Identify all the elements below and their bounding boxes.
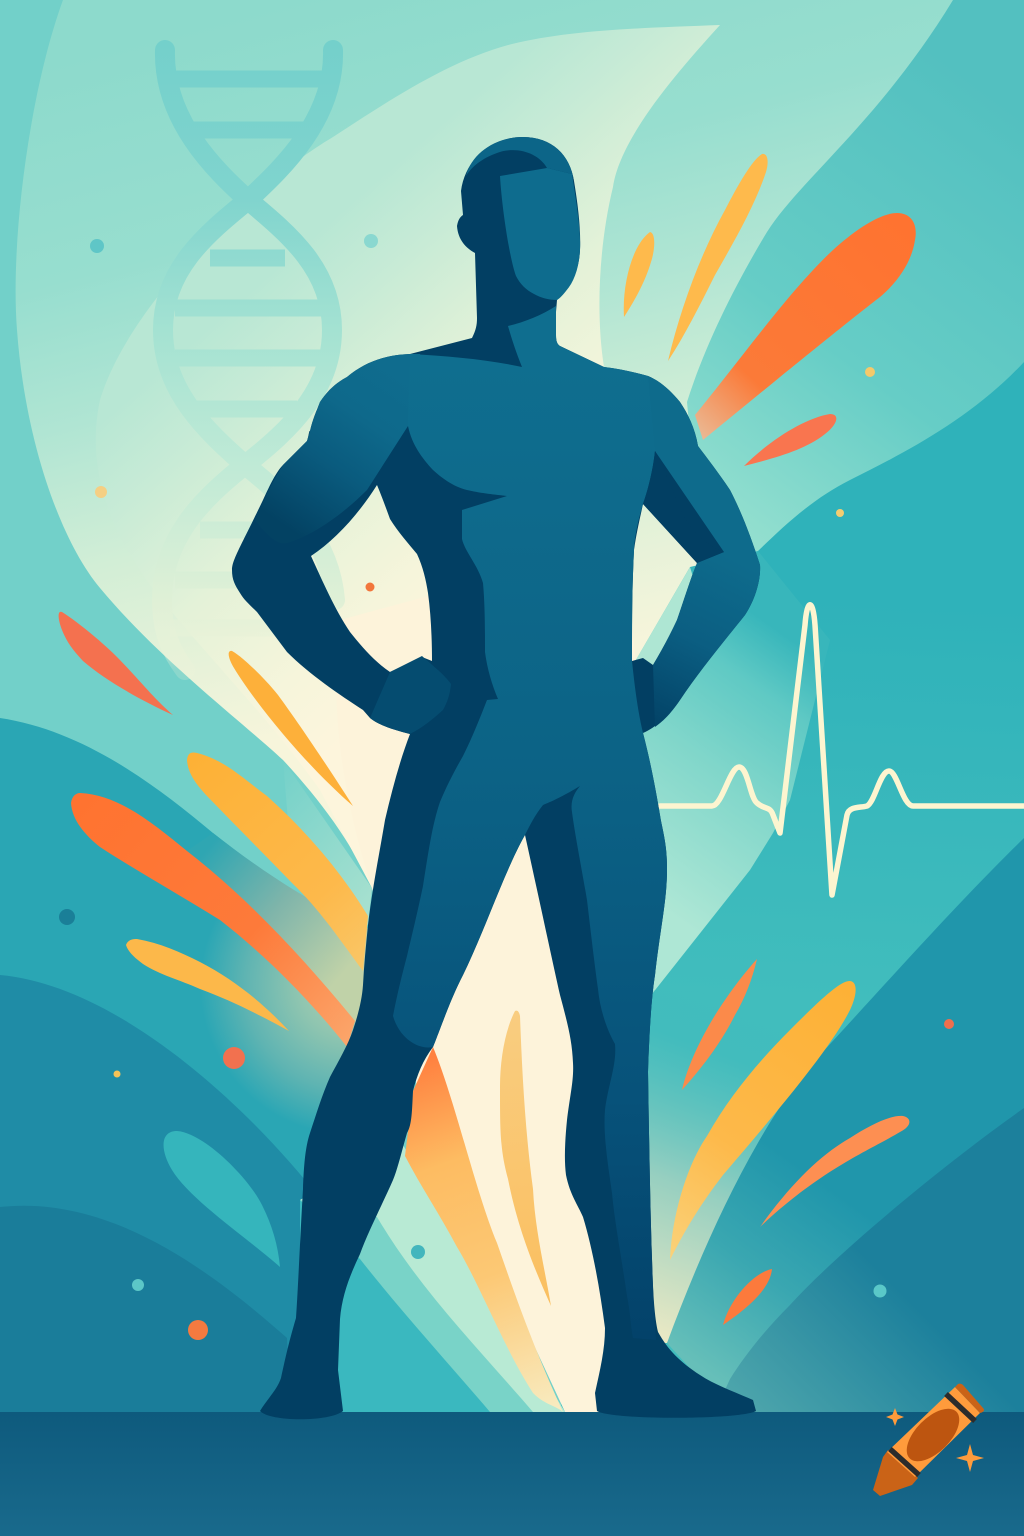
background: left layer two	[0, 975, 305, 1412]
sparkles	[886, 1408, 984, 1472]
human silhouette	[232, 137, 760, 1419]
background: mint highlight near hip	[283, 760, 372, 925]
background: left mint base	[0, 0, 640, 1412]
right armpit shadow	[643, 451, 724, 563]
decorative dots	[59, 234, 954, 1340]
DNA helix	[162, 50, 335, 670]
background: left layer three	[0, 1206, 290, 1412]
background: right darkest layer	[715, 1108, 1024, 1412]
background: right pale sliver	[645, 990, 800, 1343]
crayon tip	[873, 1450, 918, 1496]
background: right pale panel	[633, 551, 830, 994]
background: right dark layer	[667, 838, 1024, 1412]
heartbeat line	[660, 605, 1024, 895]
floor	[0, 1412, 1024, 1536]
left fist	[370, 656, 451, 734]
torso, thigh and leg light shape	[393, 306, 690, 1340]
left shoulder and upper arm	[255, 354, 440, 543]
left flames	[59, 612, 368, 1267]
background: left layer one	[0, 718, 372, 1412]
silhouette base	[232, 137, 760, 1419]
right upper arm and forearm	[648, 376, 760, 727]
background: between-leg bands	[300, 1140, 565, 1412]
centre flames between legs	[405, 1011, 563, 1412]
head cap highlight	[466, 137, 574, 181]
background: upper right teal band	[640, 0, 1024, 660]
crayon logo	[873, 1384, 984, 1496]
right flames	[624, 154, 916, 1325]
background: pale inner sweep	[96, 25, 720, 1000]
crayon body	[887, 1387, 980, 1477]
background: cream column between legs	[336, 560, 650, 1412]
background: pale outer sweep	[16, 0, 953, 900]
crayon bands	[890, 1394, 975, 1475]
face	[500, 168, 580, 300]
background: soft band between left flames	[187, 833, 372, 1025]
background: mint corner in right arm gap	[633, 567, 700, 675]
crayon label	[898, 1400, 968, 1470]
crayon cap	[955, 1384, 984, 1413]
